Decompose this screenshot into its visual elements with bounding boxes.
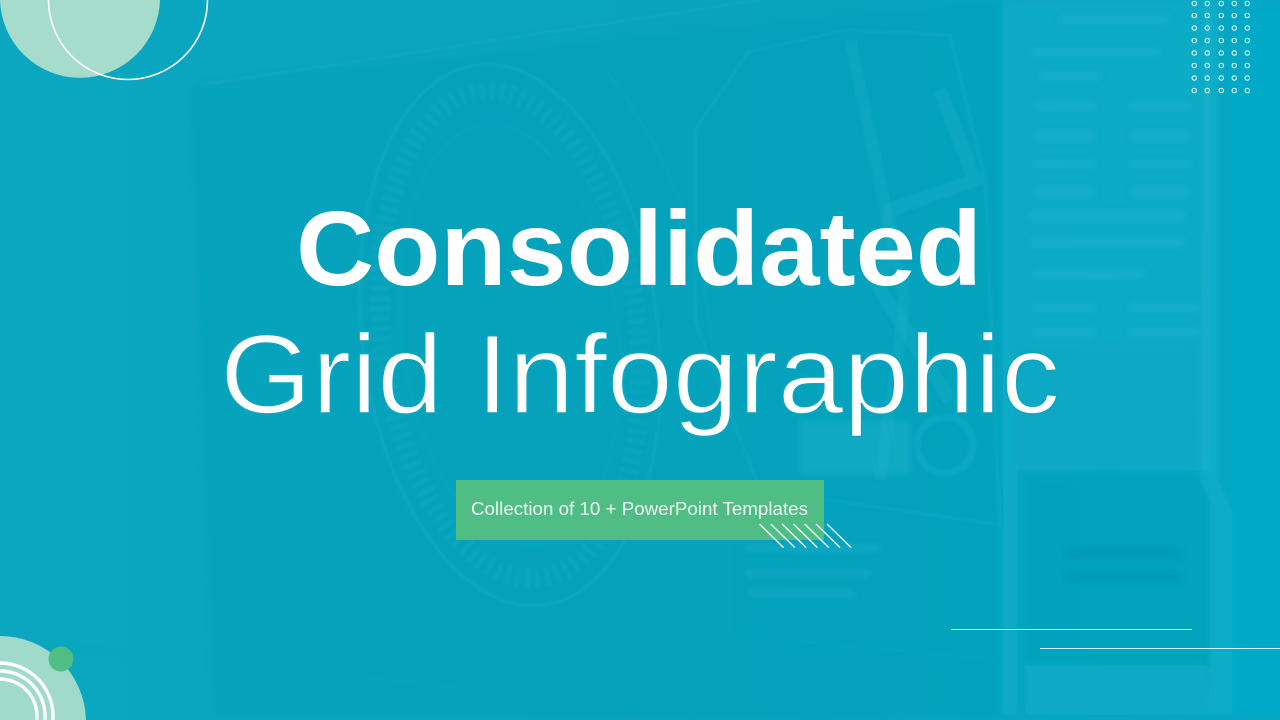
- decoration: diagonal hatch: [760, 524, 851, 548]
- decoration: dot grid: [1192, 1, 1250, 93]
- decoration: bottom-left concentric rings: [0, 663, 53, 720]
- subtitle badge: Collection of 10 + PowerPoint Templates: [471, 499, 808, 519]
- decoration: lower horizontal rule: [1040, 648, 1280, 649]
- background: blurred control-screen photo: [876, 1, 1279, 714]
- decoration: upper horizontal rule: [951, 629, 1192, 630]
- background: instrument ring: [200, 0, 760, 623]
- title line 1: Consolidated: [296, 190, 982, 308]
- background: hexagon display outlines: [883, 204, 908, 339]
- decoration: top-left pale circle: [0, 0, 160, 78]
- decoration: green dot: [48, 646, 74, 672]
- subtitle badge: [456, 480, 824, 540]
- title line 2: Grid Infographic: [220, 312, 1060, 437]
- decoration: bottom-left pale circle: [0, 636, 86, 720]
- decoration: top-left outline ring: [48, 0, 208, 80]
- background: faint data rows: [745, 15, 1200, 597]
